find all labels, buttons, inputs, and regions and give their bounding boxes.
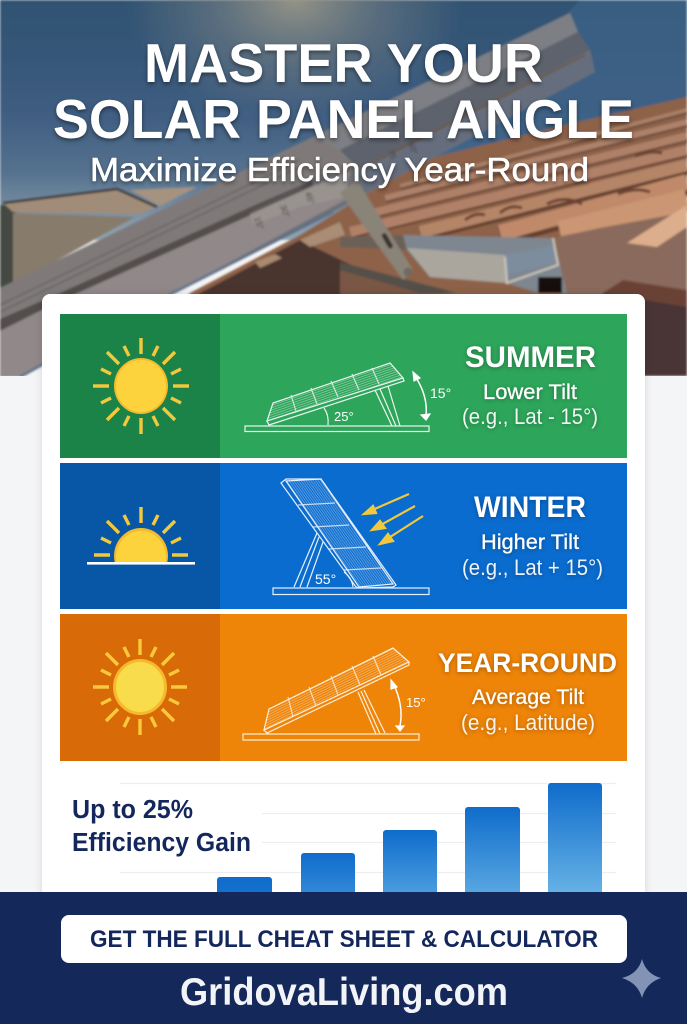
summer text: (e.g., Lat - 15°) bbox=[462, 404, 598, 429]
efficiency gain label bbox=[72, 796, 251, 857]
icon: winter rising sun bbox=[87, 507, 195, 565]
title: SOLAR PANEL ANGLE bbox=[53, 88, 634, 150]
efficiency gain label: Up to 25% bbox=[72, 796, 193, 824]
main white card bbox=[42, 294, 645, 934]
panel: year-round bbox=[60, 614, 627, 761]
header photo: roof and mounting rails: 75 bbox=[386, 148, 399, 161]
efficiency gain label: Efficiency Gain bbox=[72, 829, 251, 857]
angle label 55: 55° bbox=[315, 571, 336, 587]
header photo: roof and mounting rails: 60° bbox=[406, 140, 420, 156]
angle label 15: 15° bbox=[406, 695, 426, 710]
bar chart: efficiency gain bbox=[120, 783, 616, 917]
year-round text: Average Tilt bbox=[472, 686, 584, 709]
title: MASTER YOUR bbox=[144, 32, 543, 94]
call-to-action button bbox=[61, 915, 627, 963]
panel: winter bbox=[60, 463, 627, 609]
diagram: year-round panel bbox=[243, 648, 419, 740]
angle label 15: 15° bbox=[430, 385, 451, 401]
header photo: roof and mounting rails: 30° bbox=[278, 203, 292, 219]
diagram: winter panel at 55 degrees bbox=[273, 479, 429, 594]
header photo: roof and mounting rails: 45° bbox=[303, 190, 317, 206]
title bbox=[53, 32, 634, 150]
year-round text: (e.g., Latitude) bbox=[461, 710, 595, 735]
summer text: SUMMER bbox=[465, 341, 596, 374]
header photo: roof and mounting rails: 15° bbox=[252, 215, 266, 231]
icon: sparkle bbox=[622, 959, 661, 998]
winter text: WINTER bbox=[474, 491, 586, 524]
winter text: Higher Tilt bbox=[481, 531, 579, 554]
call-to-action button: GET THE FULL CHEAT SHEET & CALCULATOR bbox=[90, 926, 598, 953]
year-round text bbox=[438, 648, 617, 735]
icon: sun ray arrows bbox=[364, 494, 423, 544]
summer text bbox=[462, 341, 598, 429]
panel: summer bbox=[60, 314, 627, 458]
header photo: roof and mounting rails bbox=[0, 0, 687, 377]
summer text: Lower Tilt bbox=[483, 381, 577, 404]
icon: summer sun bbox=[93, 338, 189, 434]
year-round text: YEAR-ROUND bbox=[438, 648, 617, 678]
website url: GridovaLiving.com bbox=[180, 971, 508, 1014]
icon: year-round sun bbox=[93, 639, 187, 735]
subtitle: Maximize Efficiency Year-Round bbox=[90, 151, 589, 188]
footer band bbox=[0, 892, 687, 1024]
angle label 25: 25° bbox=[334, 409, 354, 424]
diagram: summer panel at 25 degrees bbox=[245, 363, 430, 432]
winter text bbox=[462, 491, 603, 580]
winter text: (e.g., Lat + 15°) bbox=[462, 555, 603, 580]
